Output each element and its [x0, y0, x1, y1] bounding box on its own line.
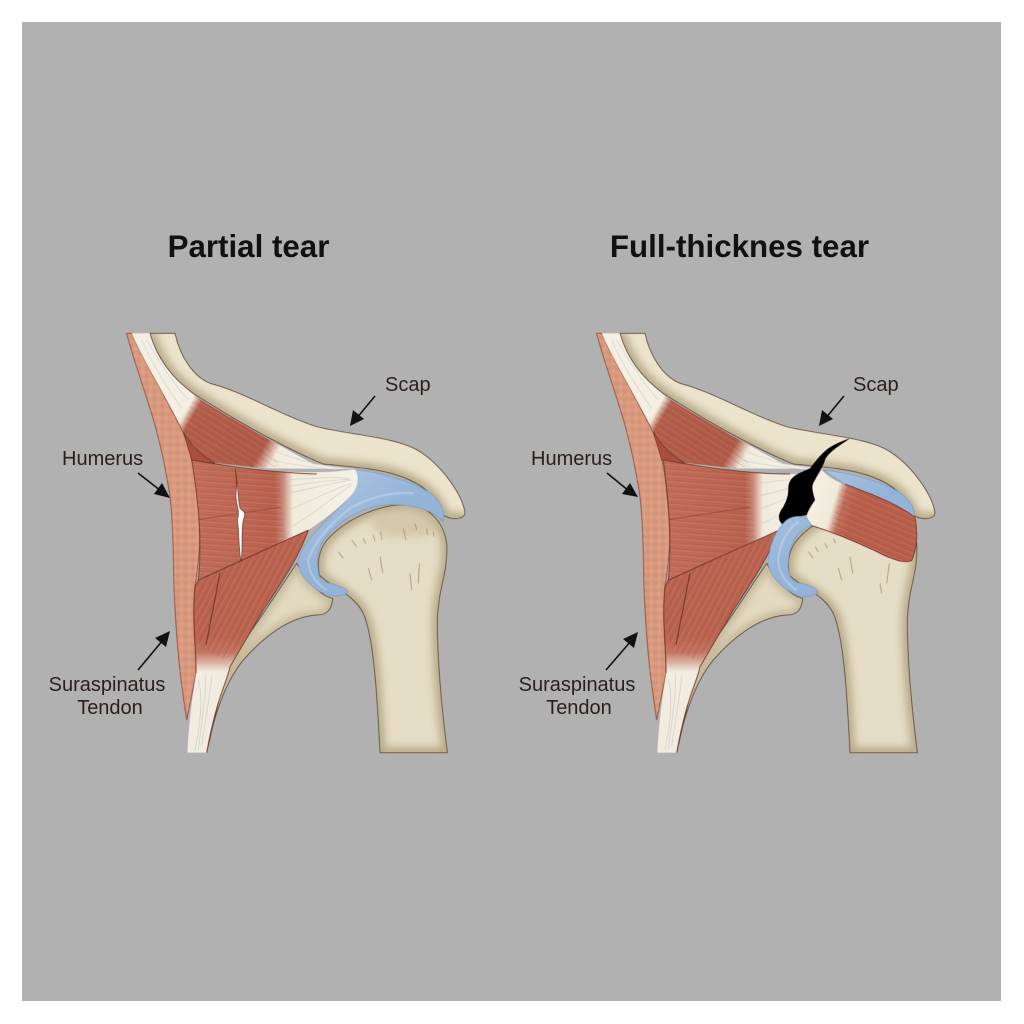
label: Suraspinatus Tendon: [49, 674, 165, 719]
diagram: full-thickness tear: [597, 333, 935, 753]
cartilage: [298, 470, 444, 596]
label: Suraspinatus Tendon: Tendon: [546, 697, 612, 719]
cartilage: lower: [768, 516, 818, 597]
arrow: Scap: [350, 396, 375, 426]
diagram: partial tear: [127, 333, 465, 753]
humeral shaft markings: [808, 538, 889, 593]
label: Humerus: Humerus: [531, 448, 612, 470]
partial tear slit: [235, 468, 245, 562]
arrow: Scap: [819, 396, 844, 426]
supraspinatus muscle and tendon: [192, 460, 358, 580]
label: Suraspinatus Tendon: Tendon: [77, 697, 143, 719]
label: Scap: Scap: [385, 374, 431, 396]
labels: full-thickness tear: [519, 374, 899, 719]
tear gap: [779, 438, 850, 525]
title: partial tear: Partial tear: [168, 229, 329, 264]
label: Scap: Scap: [853, 374, 899, 396]
arrow: Tendon: [138, 631, 170, 670]
label: Suraspinatus Tendon: Suraspinatus: [49, 674, 165, 696]
labels: partial tear: [49, 374, 431, 719]
supraspinatus muscle and tendon: [663, 460, 800, 580]
arrow: Tendon: [606, 632, 638, 670]
label: Humerus: Humerus: [62, 448, 143, 470]
cartilage: upper: [823, 470, 914, 517]
arrow: Humerus: [607, 473, 638, 497]
label: Suraspinatus Tendon: Suraspinatus: [519, 674, 635, 696]
retracted tendon band: [807, 470, 917, 562]
arrow: Humerus: [138, 473, 170, 498]
humeral head markings: [338, 523, 434, 590]
label: Suraspinatus Tendon: [519, 674, 635, 719]
title: full-thickness tear: Full-thicknes tear: [610, 229, 869, 264]
